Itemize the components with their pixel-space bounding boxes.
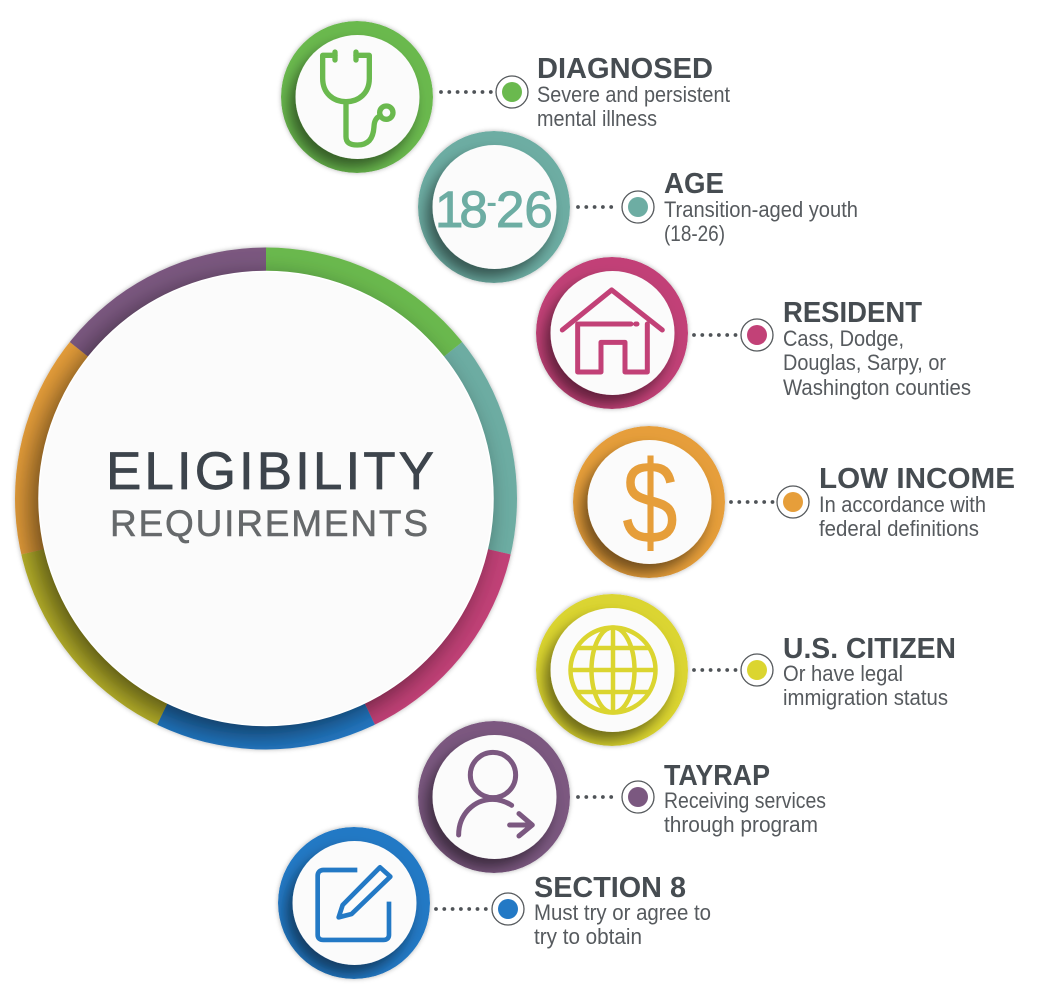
connector bbox=[694, 333, 737, 337]
label: Douglas, Sarpy, or bbox=[783, 350, 946, 375]
label: Severe and persistent bbox=[537, 82, 730, 107]
item: tayrap bbox=[418, 721, 826, 873]
label bbox=[783, 633, 956, 710]
bullet bbox=[622, 781, 654, 813]
label: through program bbox=[664, 812, 818, 837]
icon: house bbox=[536, 257, 688, 409]
label: federal definitions bbox=[819, 516, 979, 541]
label: AGE bbox=[664, 168, 724, 200]
label: mental illness bbox=[537, 106, 657, 131]
item: diagnosed bbox=[281, 21, 730, 173]
label: Cass, Dodge, bbox=[783, 326, 904, 351]
icon: edit pencil bbox=[278, 827, 430, 979]
label: try to obtain bbox=[534, 924, 642, 949]
item: resident bbox=[536, 257, 971, 409]
label: LOW INCOME bbox=[819, 463, 1015, 495]
icon: dollar sign bbox=[573, 426, 725, 578]
icon: dollar sign: $ bbox=[622, 437, 678, 569]
label: In accordance with bbox=[819, 492, 986, 517]
label: TAYRAP bbox=[664, 760, 770, 792]
label bbox=[537, 53, 730, 131]
label: RESIDENT bbox=[783, 297, 922, 329]
bullet bbox=[622, 191, 654, 223]
icon: globe bbox=[536, 594, 688, 746]
label bbox=[819, 463, 1015, 541]
icon: 18-26 badge bbox=[418, 131, 570, 283]
bullet bbox=[777, 486, 809, 518]
label: immigration status bbox=[783, 685, 948, 710]
connector bbox=[578, 795, 619, 799]
icon: stethoscope bbox=[281, 21, 433, 173]
label: Transition-aged youth bbox=[664, 197, 858, 222]
label: Must try or agree to bbox=[534, 900, 711, 925]
label: (18-26) bbox=[664, 221, 725, 246]
bullet bbox=[741, 654, 773, 686]
item: section 8 bbox=[278, 827, 711, 979]
icon: 18-26 badge: - bbox=[487, 187, 496, 218]
connector bbox=[731, 500, 774, 504]
label bbox=[783, 297, 971, 400]
label bbox=[664, 168, 858, 246]
main eligibility circle bbox=[14, 246, 518, 750]
title: eligibility: ELIGIBILITY bbox=[106, 442, 434, 501]
item: u.s. citizen bbox=[536, 594, 956, 746]
icon: 18-26 badge: 26 bbox=[496, 181, 553, 238]
connector bbox=[694, 668, 737, 672]
label: Washington counties bbox=[783, 375, 971, 400]
item: low income bbox=[573, 426, 1015, 578]
label: DIAGNOSED bbox=[537, 53, 713, 85]
item: age bbox=[418, 131, 858, 283]
label: SECTION 8 bbox=[534, 872, 686, 904]
icon: 18-26 badge: 18 bbox=[435, 181, 486, 238]
connector bbox=[441, 90, 492, 94]
icon: person with arrow bbox=[418, 721, 570, 873]
label bbox=[534, 872, 711, 949]
label: U.S. CITIZEN bbox=[783, 633, 956, 665]
label: Receiving services bbox=[664, 788, 826, 813]
connector bbox=[436, 907, 489, 911]
segmented colour ring bbox=[14, 246, 518, 750]
bullet bbox=[492, 893, 524, 925]
label: Or have legal bbox=[783, 661, 903, 686]
bullet bbox=[496, 76, 528, 108]
label bbox=[664, 760, 826, 837]
subtitle: requirements: REQUIREMENTS bbox=[110, 503, 428, 544]
bullet bbox=[741, 319, 773, 351]
connector bbox=[578, 205, 619, 209]
